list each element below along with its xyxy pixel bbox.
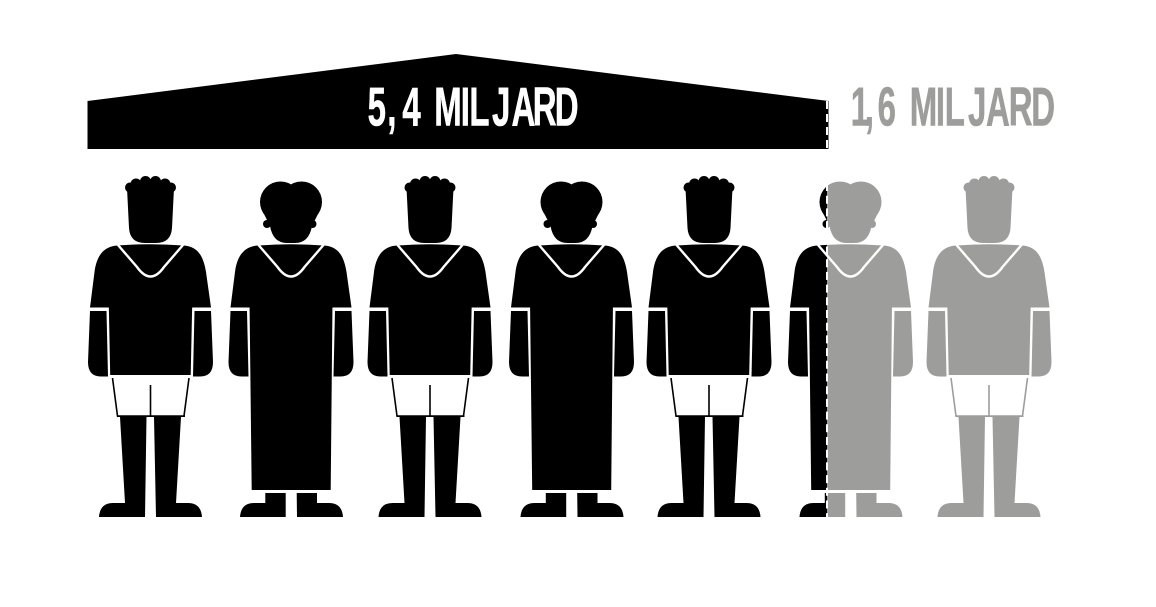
dashed divider through figure: [826, 183, 828, 517]
label: 1,6 miljard: 1,6 MILJARD: [851, 76, 1055, 138]
figure: woman 3, split black and grey: [788, 182, 913, 517]
figure: man 1: [88, 176, 213, 517]
figure: woman 1: [228, 182, 354, 517]
bracket roof: 5,4 miljard: [88, 54, 828, 149]
figure: woman 2: [509, 182, 634, 517]
figure: man 3: [646, 176, 772, 517]
figure: man 4, grey: [926, 176, 1052, 517]
figure: man 2: [368, 176, 492, 517]
dashed divider on roof: [826, 101, 828, 149]
label: 5,4 miljard: 5,4 MILJARD: [368, 76, 579, 138]
